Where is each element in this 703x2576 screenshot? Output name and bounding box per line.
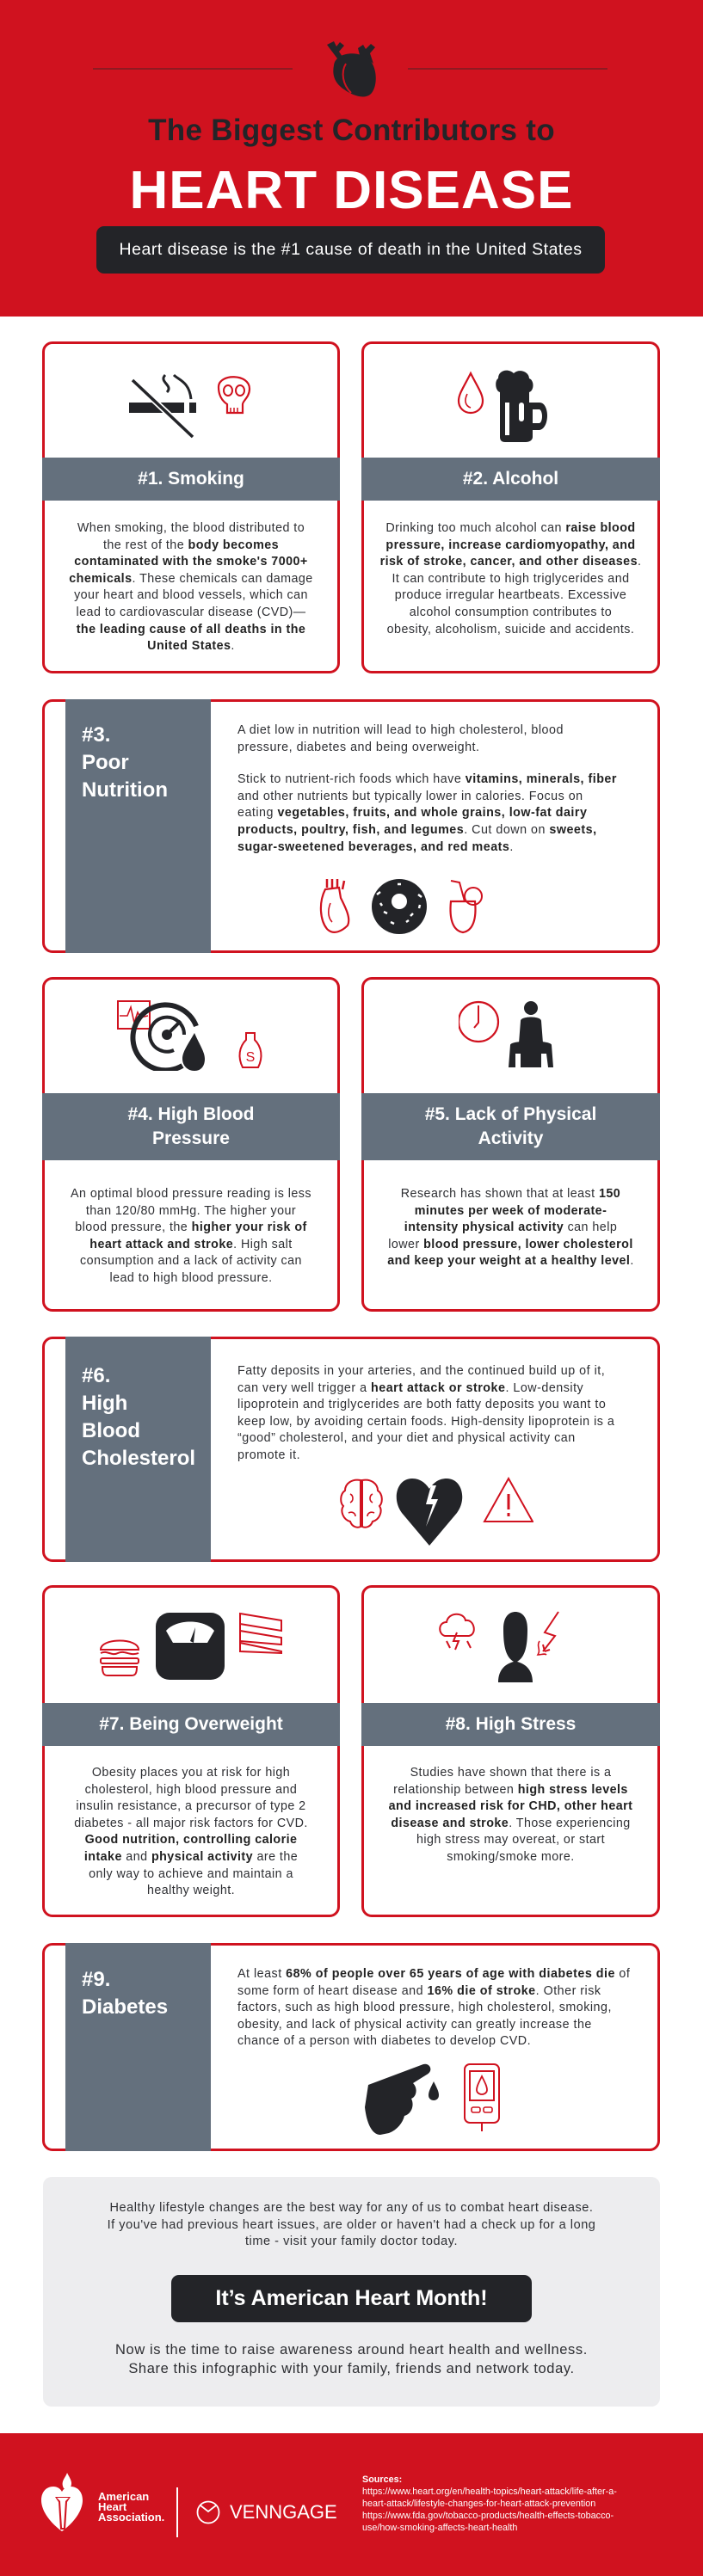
panel: poor nutrition [42, 699, 660, 953]
heading band [42, 1703, 340, 1746]
body text: insulin resistance, a precursor of type 2 [76, 1799, 306, 1813]
sources: Sources: [362, 2475, 402, 2485]
side title: Diabetes [82, 1995, 168, 2019]
body text: obesity, and lack of physical activity can greatly increase the [237, 2018, 592, 2032]
callout closing text: Now is the time to raise awareness around heart health and wellness. [115, 2342, 588, 2358]
body text [237, 1364, 614, 1462]
body text: obesity, alcoholism, suicide and accidents. [387, 623, 634, 636]
side title [65, 1943, 211, 2151]
subtitle box [96, 226, 605, 274]
body text: United States. [147, 639, 235, 653]
logo: Venngage: VENNGAGE [230, 2501, 337, 2523]
heading band: #8. High Stress [446, 1714, 576, 1734]
side title: #3. [82, 723, 110, 747]
body text: Stick to nutrient-rich foods which have vitamins, minerals, fiber [237, 772, 617, 786]
body text: cholesterol, high blood pressure and [85, 1783, 297, 1797]
body text: some form of heart disease and 16% die of stroke. Other risk [237, 1984, 601, 1998]
body text: pressure, diabetes and being overweight. [237, 741, 479, 754]
icon: storm cloud, head, lightning [439, 1612, 559, 1682]
logo: American Heart Association: American [98, 2490, 149, 2503]
title: The Biggest Contributors to [148, 114, 555, 147]
side title: #6. [82, 1364, 110, 1387]
body text: relationship between high stress levels [393, 1783, 628, 1797]
side title: Cholesterol [82, 1447, 195, 1470]
body text [380, 521, 641, 636]
heading band: #4. High Blood [127, 1104, 255, 1124]
body text: lower blood pressure, lower cholesterol [388, 1238, 633, 1251]
body text: “good” cholesterol, and your diet and physical activity can [237, 1431, 576, 1445]
divider lines [93, 68, 293, 70]
divider [176, 2487, 178, 2537]
body text: products, poultry, fish, and legumes. Cut down on sweets, [237, 823, 597, 837]
body text: Good nutrition, controlling calorie [85, 1833, 297, 1847]
side title: Blood [82, 1419, 140, 1442]
callout closing text: Share this infographic with your family, friends and network today. [128, 2361, 575, 2376]
icon: clock and sitting person [459, 1001, 553, 1067]
icons: finger prick, glucose meter [365, 2063, 500, 2135]
body text [237, 1967, 630, 2048]
body text: eating vegetables, fruits, and whole grains, low-fat dairy [237, 806, 587, 820]
body text: your heart and blood vessels, which can [74, 588, 308, 602]
body text: diabetes - all major risk factors for CVD. [74, 1817, 308, 1830]
panel: diabetes [42, 1943, 660, 2151]
body text [389, 1766, 632, 1864]
body text: lead to cardiovascular disease (CVD)— [77, 606, 305, 619]
body text: and other nutrients but typically lower in calories. Focus on [237, 790, 583, 803]
callout text [108, 2201, 595, 2248]
body text: factors, such as high blood pressure, high cholesterol, smoking, [237, 2001, 612, 2014]
heading band [42, 1093, 340, 1160]
body text: and increased risk for CHD, other heart [389, 1799, 632, 1813]
callout text: Healthy lifestyle changes are the best way for any of us to combat heart disease. [110, 2201, 594, 2215]
heading band [42, 458, 340, 501]
sources: https://www.fda.gov/tobacco-products/health-effects-tobacco- [362, 2511, 614, 2521]
side title: #9. [82, 1968, 110, 1991]
body text: disease and stroke. Those experiencing [391, 1817, 631, 1830]
body text [74, 1766, 308, 1897]
side title: Nutrition [82, 778, 168, 802]
body text: consumption and a lack of activity can [80, 1254, 302, 1268]
body text: lipoprotein and triglycerides are both fatty deposits you want to [237, 1398, 606, 1411]
body text: can very well trigger a heart attack or stroke. Low-density [237, 1381, 583, 1395]
callout text: time - visit your family doctor today. [245, 2235, 458, 2248]
footer [0, 2433, 703, 2576]
body text [71, 1187, 311, 1285]
callout closing text [115, 2342, 588, 2376]
body text: healthy weight. [147, 1884, 235, 1897]
body text: Drinking too much alcohol can raise blood [385, 521, 636, 535]
body text [237, 723, 617, 854]
side title [65, 1337, 211, 1562]
icon: no smoking and skull [129, 374, 251, 439]
panel: smoking [42, 341, 340, 673]
heading band: Activity [478, 1128, 543, 1148]
callout text: If you've had previous heart issues, are older or haven't had a check up for a long [108, 2218, 595, 2232]
body text: A diet low in nutrition will lead to high cholesterol, blood [237, 723, 564, 737]
body text: high stress may overeat, or start [416, 1833, 605, 1847]
body text: Obesity places you at risk for high [92, 1766, 290, 1780]
title: HEART DISEASE: HEART DISEASE [130, 161, 573, 220]
body text: sugar-sweetened beverages, and red meats. [237, 840, 514, 854]
body text: chemicals. These chemicals can damage [69, 572, 313, 586]
body text: than 120/80 mmHg. The higher your [86, 1204, 296, 1218]
body text: intensity physical activity can help [404, 1220, 617, 1234]
heading band: #5. Lack of Physical [425, 1104, 596, 1124]
body text: keep low, by avoiding certain foods. High-density lipoprotein is a [237, 1415, 614, 1429]
button: American Heart Month [171, 2275, 532, 2322]
body text: Research has shown that at least 150 [401, 1187, 620, 1201]
logo: American Heart Association: Heart [98, 2500, 126, 2513]
panel: alcohol [361, 341, 660, 673]
header banner [0, 0, 703, 317]
icons: meat, donut, drink [320, 879, 483, 934]
icon: burger, scale, tape [100, 1612, 282, 1680]
body text: It can contribute to high triglycerides and [392, 572, 630, 586]
panel: lack of physical activity [361, 977, 660, 1312]
sources: https://www.heart.org/en/health-topics/heart-attack/life-after-a- [362, 2487, 617, 2497]
body text: only way to achieve and maintain a [89, 1867, 293, 1881]
side title: High [82, 1392, 127, 1415]
sources: heart-attack/lifestyle-changes-for-heart-attack-prevention [362, 2499, 595, 2509]
body text [69, 521, 313, 653]
sources: use/how-smoking-affects-heart-health [362, 2523, 517, 2533]
icon: monitor, gauge, salt [117, 1000, 262, 1071]
side title: Poor [82, 751, 129, 774]
body text: risk of stroke, cancer, and other diseases. [380, 555, 641, 569]
body text: contaminated with the smoke's 7000+ [74, 555, 308, 569]
body text: and keep your weight at a healthy level. [387, 1254, 634, 1268]
heading band [361, 1703, 660, 1746]
heading band: #2. Alcohol [463, 469, 558, 489]
heading band [361, 1093, 660, 1160]
icons: brain, broken heart, warning [340, 1477, 533, 1546]
subtitle box: Heart disease is the #1 cause of death in the United States [120, 240, 582, 259]
icon: monitor, gauge, salt: S [246, 1050, 255, 1065]
body text: the rest of the body becomes [103, 538, 279, 552]
body text: minutes per week of moderate- [415, 1204, 607, 1218]
closing callout box [43, 2177, 660, 2407]
body text: promote it. [237, 1448, 300, 1462]
panel: being overweight [42, 1585, 340, 1917]
panel: high blood cholesterol [42, 1337, 660, 1562]
body text: Studies have shown that there is a [410, 1766, 611, 1780]
body text: lead to high blood pressure. [109, 1271, 273, 1285]
logo: American Heart Association [41, 2473, 164, 2531]
logo: American Heart Association: Association. [98, 2511, 164, 2524]
heading band [361, 458, 660, 501]
body text: An optimal blood pressure reading is less [71, 1187, 311, 1201]
body text: produce irregular heartbeats. Excessive [395, 588, 626, 602]
body text: At least 68% of people over 65 years of age with diabetes die of [237, 1967, 630, 1981]
body text: intake and physical activity are the [84, 1850, 298, 1864]
heading band: #1. Smoking [138, 469, 244, 489]
sources [362, 2475, 617, 2533]
heading band: #7. Being Overweight [99, 1714, 283, 1734]
side title [65, 699, 211, 953]
body text [387, 1187, 634, 1268]
body text: blood pressure, the higher your risk of [75, 1220, 307, 1234]
body text: heart attack and stroke. High salt [89, 1238, 293, 1251]
body text: the leading cause of all deaths in the [77, 623, 305, 636]
body text: pressure, increase cardiomyopathy, and [385, 538, 636, 552]
panel: high blood pressure [42, 977, 340, 1312]
icon: heart [327, 41, 376, 96]
body text: chance of a person with diabetes to develop CVD. [237, 2034, 531, 2048]
body text: alcohol consumption contributes to [410, 606, 612, 619]
icon: drop and beer [458, 370, 547, 442]
body text: Fatty deposits in your arteries, and the continued build up of it, [237, 1364, 605, 1378]
heading band: Pressure [152, 1128, 230, 1148]
body text: When smoking, the blood distributed to [77, 521, 305, 535]
panel: high stress [361, 1585, 660, 1917]
button: American Heart Month: It’s American Heart Month! [215, 2286, 488, 2310]
body text: smoking/smoke more. [447, 1850, 575, 1864]
